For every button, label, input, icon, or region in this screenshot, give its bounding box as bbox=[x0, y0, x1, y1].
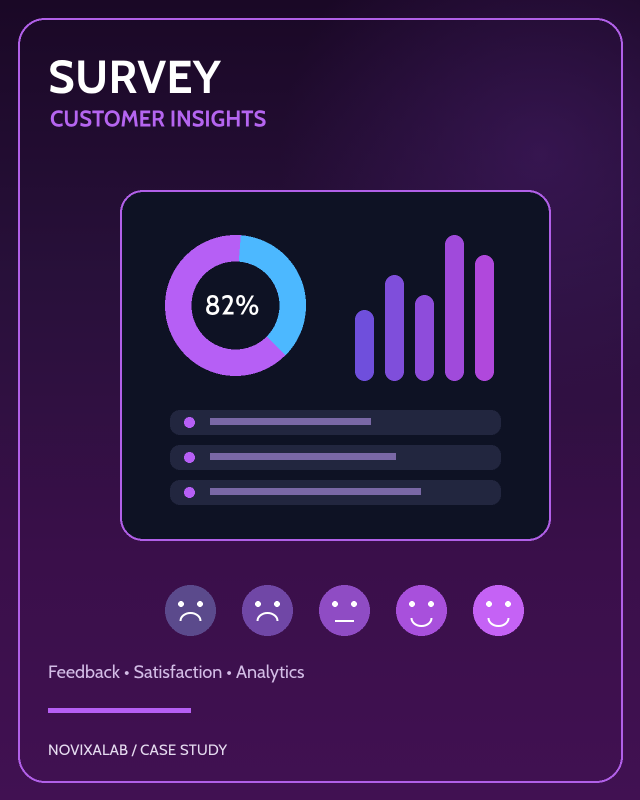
list row 3 bbox=[170, 480, 501, 505]
accent bar bbox=[48, 708, 191, 713]
rating faces bbox=[165, 585, 524, 636]
title: SURVEY bbox=[48, 49, 222, 105]
panel: dashboard bbox=[121, 191, 550, 540]
bar chart bbox=[355, 235, 494, 381]
list row 1 bbox=[170, 410, 501, 435]
list row 2 bbox=[170, 445, 501, 470]
icon: very unhappy face bbox=[165, 585, 216, 636]
subtitle: CUSTOMER INSIGHTS bbox=[50, 106, 266, 132]
icon: neutral face bbox=[319, 585, 370, 636]
tagline: Feedback • Satisfaction • Analytics bbox=[48, 661, 304, 683]
icon: happy face bbox=[396, 585, 447, 636]
donut chart bbox=[178, 235, 306, 363]
donut value: 82% bbox=[204, 288, 260, 322]
icon: very happy face bbox=[473, 585, 524, 636]
footer label: NOVIXALAB / CASE STUDY bbox=[48, 741, 228, 759]
icon: unhappy face bbox=[242, 585, 293, 636]
